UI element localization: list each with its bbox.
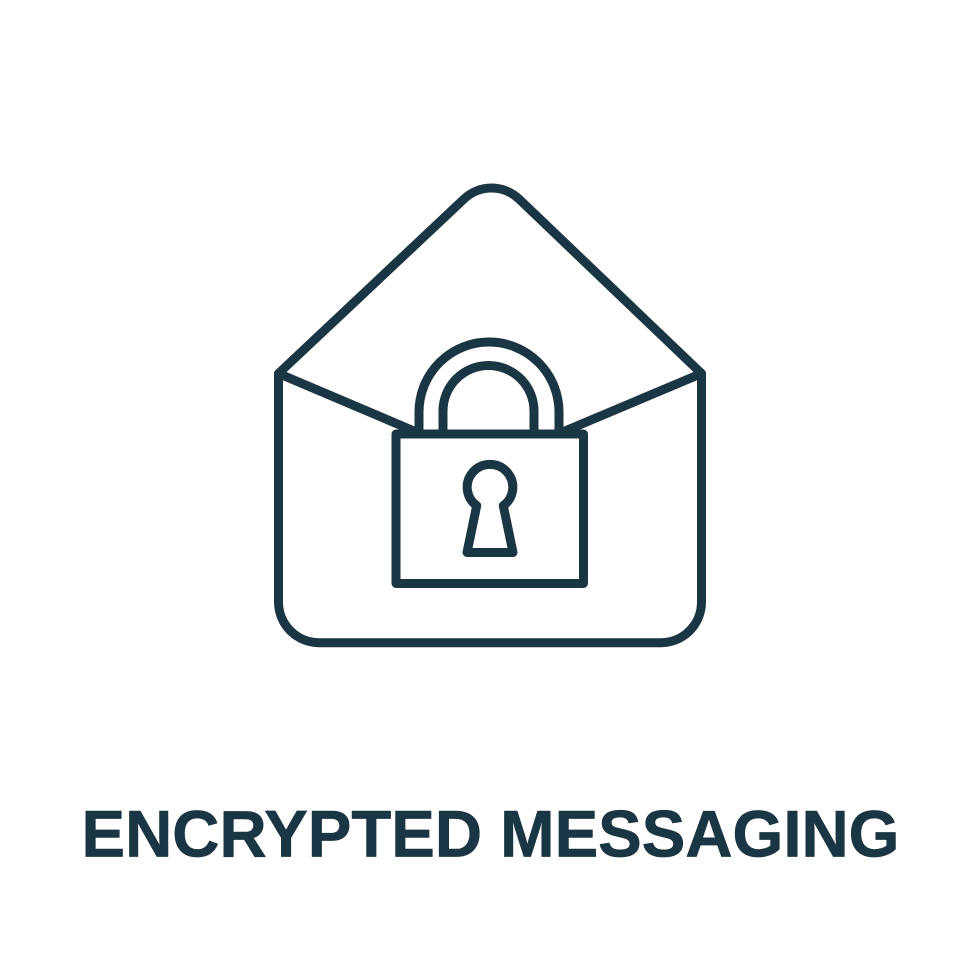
padlock inner shackle [443,366,534,434]
envelope inner fold right [565,374,702,431]
envelope inner fold left [278,374,414,431]
padlock body [396,434,584,584]
title: ENCRYPTED MESSAGING [82,796,900,870]
envelope body and open flap [278,188,702,643]
icon: encrypted envelope [278,188,702,643]
keyhole [467,464,513,552]
padlock outer shackle [419,342,559,434]
